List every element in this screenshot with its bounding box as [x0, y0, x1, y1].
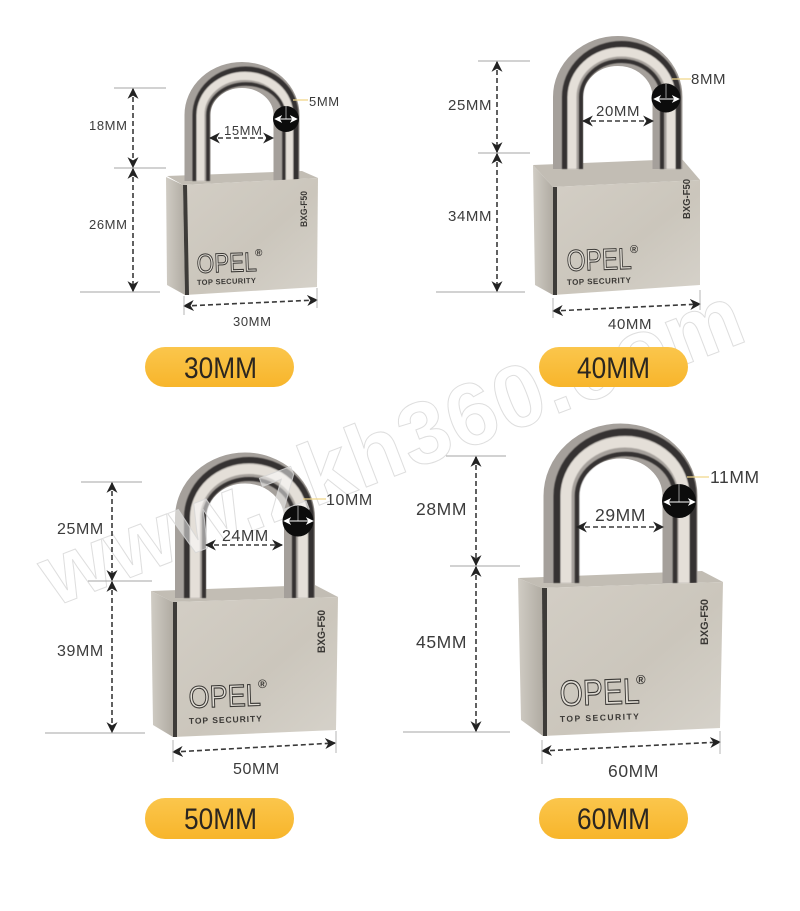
- dimension lines 40: [436, 61, 700, 333]
- thickness callout 5MM: [273, 94, 340, 132]
- size pill 40MM: [539, 347, 688, 387]
- thickness callout 10MM: [282, 492, 373, 536]
- padlock body 40: TOP SECURITY: [567, 276, 632, 287]
- dimension lines 40: 34MM: [448, 208, 492, 225]
- size pill 30MM: [145, 347, 294, 387]
- thickness callout 5MM: 5MM: [309, 94, 340, 109]
- dimension lines 30: [80, 88, 317, 329]
- size pill 40MM: 40MM: [577, 352, 650, 385]
- panel: 60MM padlock: [403, 432, 760, 781]
- dimension lines 50: [45, 482, 336, 778]
- padlock body 30: [166, 69, 318, 295]
- thickness callout 10MM: 10MM: [326, 492, 373, 509]
- dimension lines 60: 60MM: [608, 761, 659, 781]
- dimension lines 60: [403, 456, 720, 781]
- padlock body 60: TOP SECURITY: [560, 711, 639, 724]
- padlock body 40: BXG-F50: [682, 179, 693, 219]
- dimension lines 60: 45MM: [416, 632, 467, 652]
- thickness callout 8MM: 8MM: [691, 71, 726, 88]
- thickness callout 11MM: [662, 467, 760, 518]
- dimension lines 30: 18MM: [89, 118, 128, 133]
- dimension lines 30: 26MM: [89, 217, 128, 232]
- dimension lines 50: 24MM: [222, 528, 269, 545]
- brand logo 60: OPEL: [559, 670, 640, 714]
- brand logo 50: OPEL: [188, 678, 261, 715]
- brand logo 30: OPEL: [196, 247, 257, 279]
- size pill 50MM: 50MM: [184, 803, 257, 836]
- padlock body 60: [518, 432, 723, 736]
- dimension lines 50: 25MM: [57, 521, 104, 538]
- panel: 30MM padlock: [80, 69, 340, 329]
- thickness callout 11MM: 11MM: [710, 467, 760, 487]
- thickness callout 8MM: [652, 71, 726, 112]
- size pill 50MM: [145, 798, 294, 839]
- padlock body 60: BXG-F50: [699, 599, 711, 645]
- size pill 60MM: [539, 798, 688, 839]
- dimension lines 50: 39MM: [57, 643, 104, 660]
- padlock body 40: ®: [630, 244, 638, 256]
- padlock body 50: TOP SECURITY: [189, 713, 262, 726]
- dimension lines 30: 30MM: [233, 314, 272, 329]
- padlock body 50: ®: [258, 677, 267, 691]
- padlock body 30: ®: [255, 248, 263, 259]
- brand logo 40: OPEL: [566, 243, 632, 278]
- dimension lines 40: 40MM: [608, 316, 652, 333]
- watermark: www.zkh360.com: [24, 265, 756, 625]
- dimension lines 60: 28MM: [416, 499, 467, 519]
- panel: 40MM padlock: [436, 44, 726, 333]
- padlock body 40: [533, 44, 700, 295]
- dimension lines 40: 20MM: [596, 103, 640, 120]
- padlock body 60: ®: [636, 672, 646, 687]
- dimension lines 40: 25MM: [448, 97, 492, 114]
- size pill 60MM: 60MM: [577, 803, 650, 836]
- size pill 30MM: 30MM: [184, 352, 257, 385]
- padlock body 30: BXG-F50: [299, 191, 309, 227]
- padlock body 50: [151, 460, 338, 737]
- dimension lines 30: 15MM: [224, 123, 263, 138]
- dimension lines 50: 50MM: [233, 761, 280, 778]
- dimension lines 60: 29MM: [595, 505, 646, 525]
- padlock body 50: BXG-F50: [316, 610, 328, 653]
- padlock body 30: TOP SECURITY: [197, 276, 256, 287]
- panel: 50MM padlock: [151, 460, 338, 737]
